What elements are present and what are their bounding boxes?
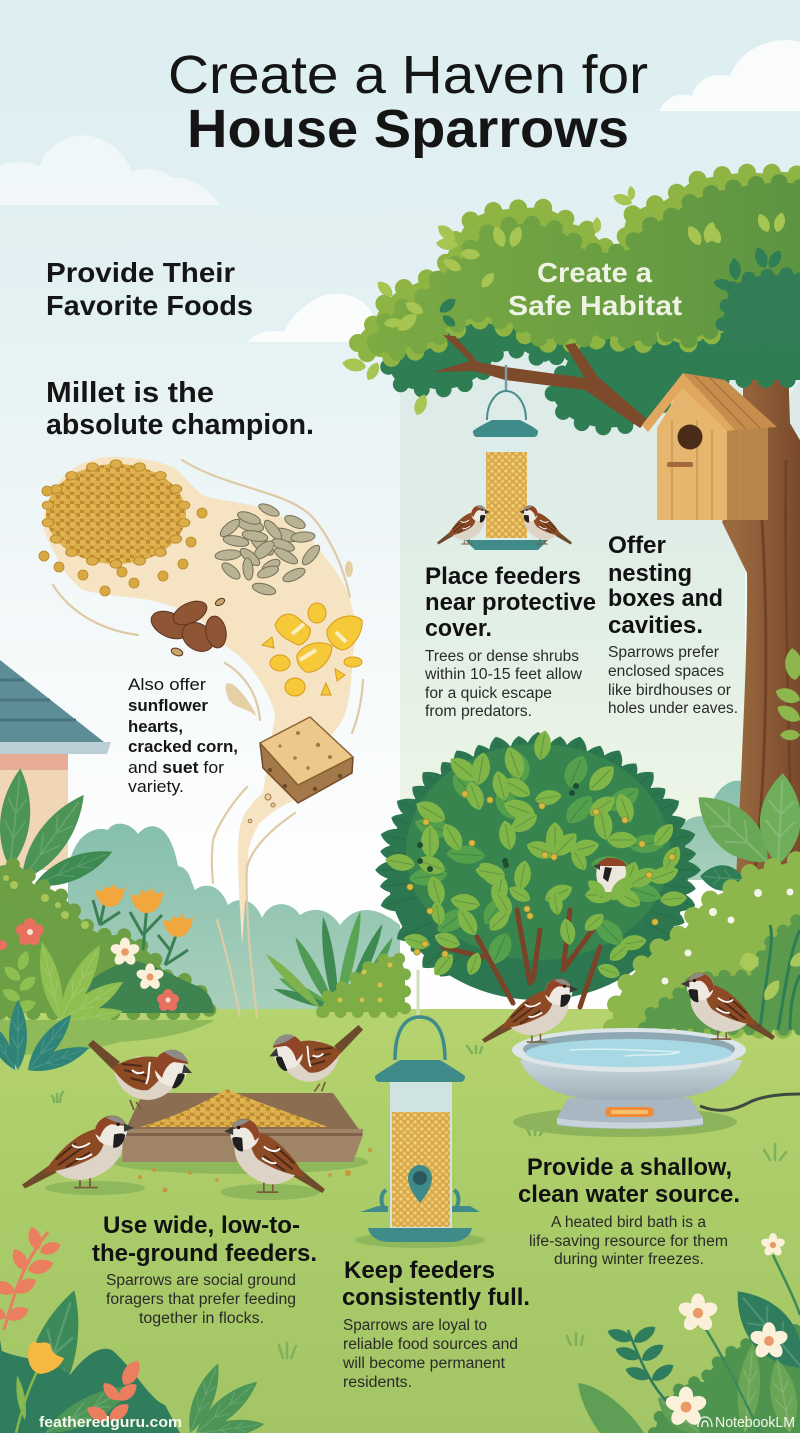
tree canopy xyxy=(341,172,800,427)
heading: provide their favorite foods: Favorite Foods xyxy=(46,290,253,321)
text: keep feeders full: reliable food sources and xyxy=(343,1336,518,1353)
plant: teal blades xyxy=(0,1000,92,1078)
bird: feeder right xyxy=(519,505,572,544)
bird: tray top left xyxy=(88,1040,192,1110)
text: also offer: and suet for xyxy=(128,758,224,777)
heading: provide their favorite foods: Provide Their xyxy=(46,257,235,288)
bird bath xyxy=(482,973,800,1137)
text: provide water: clean water source. xyxy=(518,1181,740,1208)
text: place feeders: cover. xyxy=(425,615,492,642)
cloud: behind food heading xyxy=(248,293,376,342)
flowers: white and pink xyxy=(0,918,179,1011)
heading: title: House Sparrows xyxy=(187,99,629,159)
text: offer nesting boxes: enclosed spaces xyxy=(608,663,724,680)
illustration: suet cake xyxy=(248,717,353,823)
cloud: top right xyxy=(660,40,800,111)
bush: protective cover xyxy=(375,729,701,1007)
text: provide water: Provide a shallow, xyxy=(527,1154,732,1181)
text: use wide feeders: Sparrows are social ground xyxy=(106,1272,296,1289)
text: keep feeders full: residents. xyxy=(343,1374,412,1391)
treeline: background right xyxy=(650,781,745,880)
text: offer nesting boxes: boxes and xyxy=(608,585,723,612)
hanging feeder xyxy=(437,365,572,550)
tufts of grass xyxy=(52,1046,786,1358)
text: place feeders: Trees or dense shrubs xyxy=(425,648,579,665)
tree trunk xyxy=(722,330,800,880)
heading: create a safe habitat: Create a xyxy=(537,257,652,288)
illustration: millet pile xyxy=(39,460,207,596)
food swirl ribbon xyxy=(43,457,363,1017)
flowers: orange tulips xyxy=(93,883,193,965)
text: offer nesting boxes: cavities. xyxy=(608,612,703,639)
text: offer nesting boxes: holes under eaves. xyxy=(608,700,738,717)
text: use wide feeders: foragers that prefer feeding xyxy=(106,1291,296,1308)
treeline: background left xyxy=(68,824,400,1015)
text: keep feeders full: Sparrows are loyal to xyxy=(343,1317,487,1334)
text: place feeders: from predators. xyxy=(425,703,532,720)
grass lawn xyxy=(0,1009,800,1433)
text: place feeders: for a quick escape xyxy=(425,685,552,702)
text: place feeders: near protective xyxy=(425,589,596,616)
text: also offer: hearts, xyxy=(128,717,183,736)
birdhouse xyxy=(642,373,777,520)
text: place feeders xyxy=(424,563,596,720)
heading: create a safe habitat: Safe Habitat xyxy=(508,290,682,321)
bird: in bush xyxy=(584,858,637,905)
illustration: sunflower seeds xyxy=(215,501,323,597)
flower: yellow xyxy=(28,1342,64,1374)
tree branches xyxy=(433,335,648,428)
flowers: cream xyxy=(664,1233,789,1428)
heading: millet champion: absolute champion. xyxy=(46,409,314,441)
text: place feeders: Place feeders xyxy=(425,563,581,590)
text: offer nesting boxes: like birdhouses or xyxy=(608,682,731,699)
bird: tray top right xyxy=(269,1025,363,1092)
text: offer nesting boxes xyxy=(608,532,738,717)
foliage: bottom left xyxy=(0,1225,266,1433)
bird: tray lower right xyxy=(224,1119,325,1193)
right garden: big leaves and leaves on trunk xyxy=(684,647,800,893)
illustration: cracked corn xyxy=(262,603,362,696)
text: use wide feeders xyxy=(92,1212,317,1327)
plants: light green blades xyxy=(0,940,128,1030)
credit: NotebookLM: NotebookLM xyxy=(715,1414,795,1431)
text: offer nesting boxes: Offer xyxy=(608,532,666,559)
right garden bushes xyxy=(612,859,800,1030)
text: keep feeders full: will become permanent xyxy=(342,1355,506,1372)
house xyxy=(0,660,111,870)
text: also offer: variety. xyxy=(128,777,184,796)
foliage: bottom right xyxy=(578,1233,800,1433)
text: also offer: cracked corn, xyxy=(128,737,238,756)
text: also offer xyxy=(128,675,238,796)
heading: create a safe habitat xyxy=(508,257,682,321)
text: keep feeders full: Keep feeders xyxy=(344,1257,495,1284)
bird: tray lower left xyxy=(22,1116,134,1188)
text: offer nesting boxes: Sparrows prefer xyxy=(608,644,719,661)
text: provide water xyxy=(518,1154,740,1268)
heading: millet champion: Millet is the xyxy=(46,377,214,409)
bird: feeder left xyxy=(437,505,490,544)
text: use wide feeders: together in flocks. xyxy=(139,1310,264,1327)
small bush: behind feeder xyxy=(263,909,405,1012)
illustration: nuts xyxy=(147,596,229,657)
lawn mound xyxy=(0,1020,215,1055)
tray feeder with birds xyxy=(22,1025,372,1200)
left garden xyxy=(0,767,215,1078)
bird: bath left xyxy=(482,979,578,1043)
bird: bath right xyxy=(681,973,775,1040)
heading: title xyxy=(168,45,648,159)
text: place feeders: within 10-15 feet allow xyxy=(424,666,583,683)
ground tube feeder xyxy=(355,970,485,1248)
text: keep feeders full: consistently full. xyxy=(342,1284,530,1311)
text: provide water: during winter freezes. xyxy=(554,1251,704,1268)
cloud: upper left xyxy=(0,135,220,205)
text: provide water: life-saving resource for them xyxy=(529,1233,728,1250)
text: also offer: sunflower xyxy=(128,696,208,715)
heading: title: Create a Haven for xyxy=(168,45,648,105)
text: keep feeders full xyxy=(342,1257,530,1391)
credit: featheredguru.com: featheredguru.com xyxy=(39,1414,182,1431)
text: provide water: A heated bird bath is a xyxy=(551,1214,706,1231)
panel: habitat background xyxy=(400,340,745,840)
heading: provide their favorite foods xyxy=(46,257,253,321)
text: offer nesting boxes: nesting xyxy=(608,560,692,587)
text: use wide feeders: Use wide, low-to- xyxy=(103,1212,300,1239)
text: use wide feeders: the-ground feeders. xyxy=(92,1240,317,1267)
heading: millet champion xyxy=(46,377,314,441)
text: also offer: Also offer xyxy=(128,675,206,694)
